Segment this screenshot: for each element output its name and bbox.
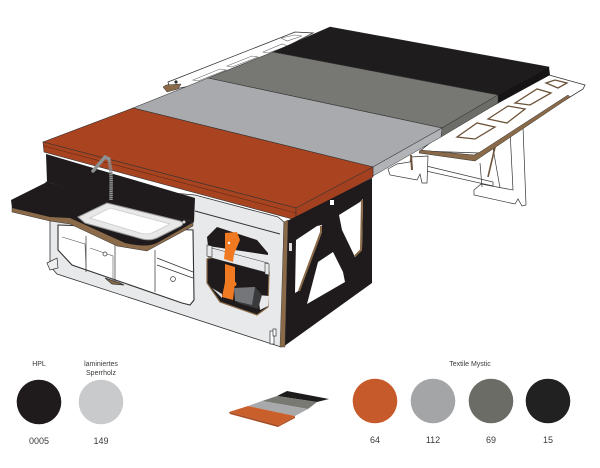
grey device bbox=[235, 287, 262, 309]
plate bbox=[420, 75, 585, 153]
side panel with windows bbox=[280, 178, 372, 347]
legend: HPL: 0005 bbox=[29, 436, 49, 446]
storage hatch with orange strap bbox=[207, 227, 269, 315]
legs bbox=[388, 113, 526, 206]
mattress panel: black bbox=[273, 27, 550, 103]
legend: laminated plywood bbox=[79, 361, 123, 446]
rear right support frame and legs bbox=[388, 75, 585, 206]
small latch bbox=[330, 200, 334, 205]
legend title: Textile Mystic: Textile Mystic bbox=[449, 361, 491, 368]
plate slots bbox=[457, 80, 567, 139]
swatch 64 bbox=[353, 379, 397, 445]
fold-out counter with sink bbox=[11, 182, 194, 251]
divider line on front panel bbox=[195, 211, 280, 234]
window left bbox=[295, 225, 322, 293]
swatch 15 bbox=[526, 379, 570, 445]
orange worktop bbox=[43, 108, 373, 220]
swatch 69: 69 bbox=[486, 435, 496, 445]
cabinet front panel bbox=[46, 182, 284, 347]
cabinet opening with drawers bbox=[47, 225, 194, 305]
window right bbox=[339, 199, 363, 257]
faucet bbox=[93, 157, 111, 200]
legend: HPL bbox=[17, 361, 61, 446]
swatch 15: 15 bbox=[543, 435, 553, 445]
plate front edge bbox=[419, 95, 570, 161]
counter top bbox=[11, 182, 194, 246]
corner latch bbox=[270, 329, 276, 344]
strap ends bbox=[207, 245, 269, 275]
swatch 69 bbox=[469, 379, 513, 445]
strap band bbox=[208, 247, 268, 273]
rear left support frame bbox=[163, 32, 313, 92]
window centre bbox=[307, 252, 345, 304]
white lower interior bbox=[258, 295, 269, 310]
counter edge bbox=[12, 207, 193, 251]
upper hatch opening bbox=[207, 227, 268, 255]
swatch 64: 64 bbox=[370, 435, 380, 445]
legend: HPL: HPL bbox=[32, 361, 46, 368]
legend: laminated plywood: 149 bbox=[93, 436, 109, 446]
orange strap bbox=[224, 232, 240, 262]
swatch 112 bbox=[411, 379, 455, 445]
lower hatch opening bbox=[207, 256, 269, 315]
sink bbox=[78, 203, 183, 240]
mattress panel: dark grey bbox=[208, 52, 498, 137]
legend: laminated plywood: laminiertes bbox=[84, 361, 118, 368]
swatch 112: 112 bbox=[426, 435, 440, 445]
legend: laminated plywood: Sperrholz bbox=[86, 370, 116, 377]
mattress panel: light grey bbox=[133, 78, 442, 176]
black backsplash bbox=[46, 154, 195, 222]
mini mattress illustration bbox=[229, 391, 329, 427]
